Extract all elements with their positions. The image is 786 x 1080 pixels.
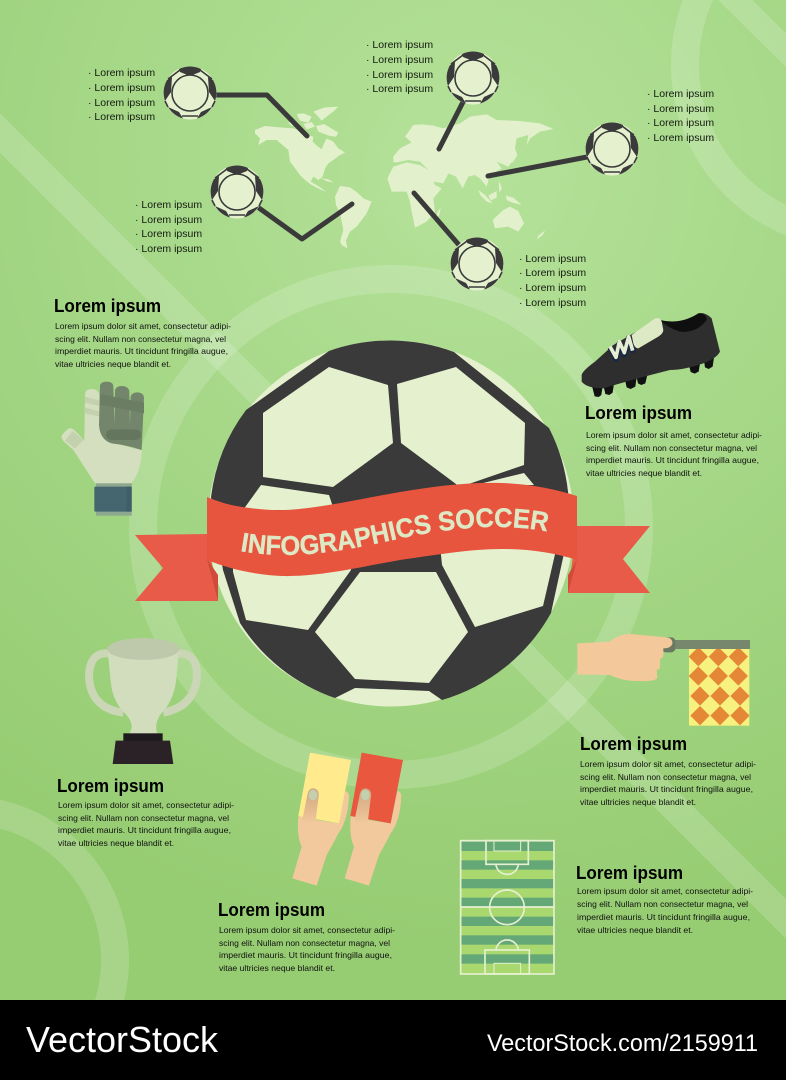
icon: soccer pitch [461,841,554,974]
flag cloth [689,647,750,726]
text block: trophy: vitae ultricies neque blandit et. [58,838,174,848]
icon: hands with yellow and red cards [292,753,403,886]
list 1: · Lorem ipsum [88,82,155,94]
text block: pitch: Lorem ipsum dolor sit amet, consectetur adipi- [577,886,753,896]
icon: goalkeeper glove [62,382,144,516]
text block: pitch: imperdiet mauris. Ut tincidunt fringilla augue, [577,912,750,922]
text block: cards: vitae ultricies neque blandit et. [219,963,335,973]
Old World [387,114,553,240]
text block: flag: imperdiet mauris. Ut tincidunt fringilla augue, [580,784,753,794]
list 5: · Lorem ipsum [519,267,586,279]
footer bar [0,1000,786,1080]
handles [89,653,197,713]
left hand [292,791,349,886]
text block: boot: vitae ultricies neque blandit et. [586,468,702,478]
base [123,733,163,741]
list 2: · Lorem ipsum [366,39,433,51]
Madagascar [436,208,441,220]
left tail [135,534,218,601]
text block: boot: Lorem ipsum [585,403,692,423]
text block: boot [585,403,762,478]
marker 5 [450,238,504,290]
list 5: · Lorem ipsum [519,297,586,309]
text block: glove: imperdiet mauris. Ut tincidunt fringilla augue, [55,346,228,356]
text block: pitch: vitae ultricies neque blandit et. [577,925,693,935]
studs [592,357,714,397]
connector 2 [439,102,463,149]
text block: flag [580,734,756,807]
list 3: · Lorem ipsum [647,117,714,129]
footer url: VectorStock.com/2159911 [487,1030,758,1057]
text block: flag: vitae ultricies neque blandit et. [580,797,696,807]
Japan [505,155,517,164]
list 5: · Lorem ipsum [519,282,586,294]
South America [335,186,372,248]
text block: trophy: Lorem ipsum dolor sit amet, consectetur adipi- [58,800,234,810]
connector 5 [414,193,459,245]
text block: trophy: Lorem ipsum [57,776,164,796]
connector lines [216,95,587,245]
right thumb [354,788,371,823]
text block: trophy [57,776,234,848]
red card [350,753,403,823]
list 4 [135,199,202,255]
icon: trophy [89,638,197,764]
text block: boot: Lorem ipsum dolor sit amet, consectetur adipi- [586,430,762,440]
New Zealand [537,230,545,240]
list 3 [647,88,714,144]
text block: cards: imperdiet mauris. Ut tincidunt fringilla augue, [219,950,392,960]
text block: flag: scing elit. Nullam non consectetur magna, vel [580,772,751,782]
text block: glove: Lorem ipsum dolor sit amet, consectetur adipi- [55,321,231,331]
connector 1 [216,95,307,136]
list 1: · Lorem ipsum [88,67,155,79]
ribbon banner [135,482,650,601]
text block: cards: Lorem ipsum [218,900,325,920]
list 1: · Lorem ipsum [88,97,155,109]
connector 4 [259,204,352,239]
Americas [255,107,372,248]
text block: glove: Lorem ipsum [54,296,161,316]
list 1: · Lorem ipsum [88,111,155,123]
list 4: · Lorem ipsum [135,214,202,226]
list 4: · Lorem ipsum [135,243,202,255]
flag stick [672,640,750,649]
text block: boot: scing elit. Nullam non consectetur magna, vel [586,443,757,453]
marker 1 [164,66,216,120]
text block: pitch [576,863,753,935]
world map [255,107,553,248]
marker 4 [210,166,264,218]
icon: referee hand with flag [577,634,750,726]
Eurasia [393,114,553,188]
text block: trophy: scing elit. Nullam non consectetur magna, vel [58,813,229,823]
text block: cards: Lorem ipsum dolor sit amet, consectetur adipi- [219,925,395,935]
text block: flag: Lorem ipsum dolor sit amet, consectetur adipi- [580,759,756,769]
Australia [493,207,524,232]
connector 3 [488,157,587,176]
right tail [568,526,650,593]
ribbon title [240,527,550,555]
hand [577,634,672,681]
Greenland [313,107,338,121]
text block: cards: scing elit. Nullam non consectetur magna, vel [219,938,390,948]
Cuba [321,178,334,183]
text block: pitch: scing elit. Nullam non consectetur magna, vel [577,899,748,909]
text block: glove: scing elit. Nullam non consectetur magna, vel [55,334,226,344]
text block: glove [54,296,231,369]
North America [255,126,345,192]
list 3: · Lorem ipsum [647,88,714,100]
left thumb [302,788,319,823]
list 5: · Lorem ipsum [519,253,586,265]
footer logo: VectorStock [26,1019,219,1060]
ribbon body [207,483,577,576]
marker 3 [586,122,638,176]
Southeast Asia islands [478,180,522,205]
text block: cards [218,900,395,973]
list 3: · Lorem ipsum [647,103,714,115]
mini ball markers [164,52,638,290]
text block: flag: Lorem ipsum [580,734,687,754]
marker 2 [446,52,500,104]
list 4: · Lorem ipsum [135,199,202,211]
Africa [387,162,442,228]
Arctic islands [288,113,338,137]
soccer ball [208,340,574,706]
list 5 [519,253,586,309]
cup [108,650,179,734]
list 2 [366,39,433,95]
list 1 [88,67,155,123]
text block: boot: imperdiet mauris. Ut tincidunt fringilla augue, [586,455,759,465]
yellow card [298,753,351,823]
text block: pitch: Lorem ipsum [576,863,683,883]
list 3: · Lorem ipsum [647,132,714,144]
list 4: · Lorem ipsum [135,228,202,240]
right hand [345,791,401,886]
list 2: · Lorem ipsum [366,83,433,95]
text block: glove: vitae ultricies neque blandit et. [55,359,171,369]
icon: soccer boot [582,313,720,397]
ribbon banner: INFOGRAPHICS SOCCER [242,508,548,556]
text block: trophy: imperdiet mauris. Ut tincidunt fringilla augue, [58,825,231,835]
list 2: · Lorem ipsum [366,69,433,81]
list 2: · Lorem ipsum [366,54,433,66]
